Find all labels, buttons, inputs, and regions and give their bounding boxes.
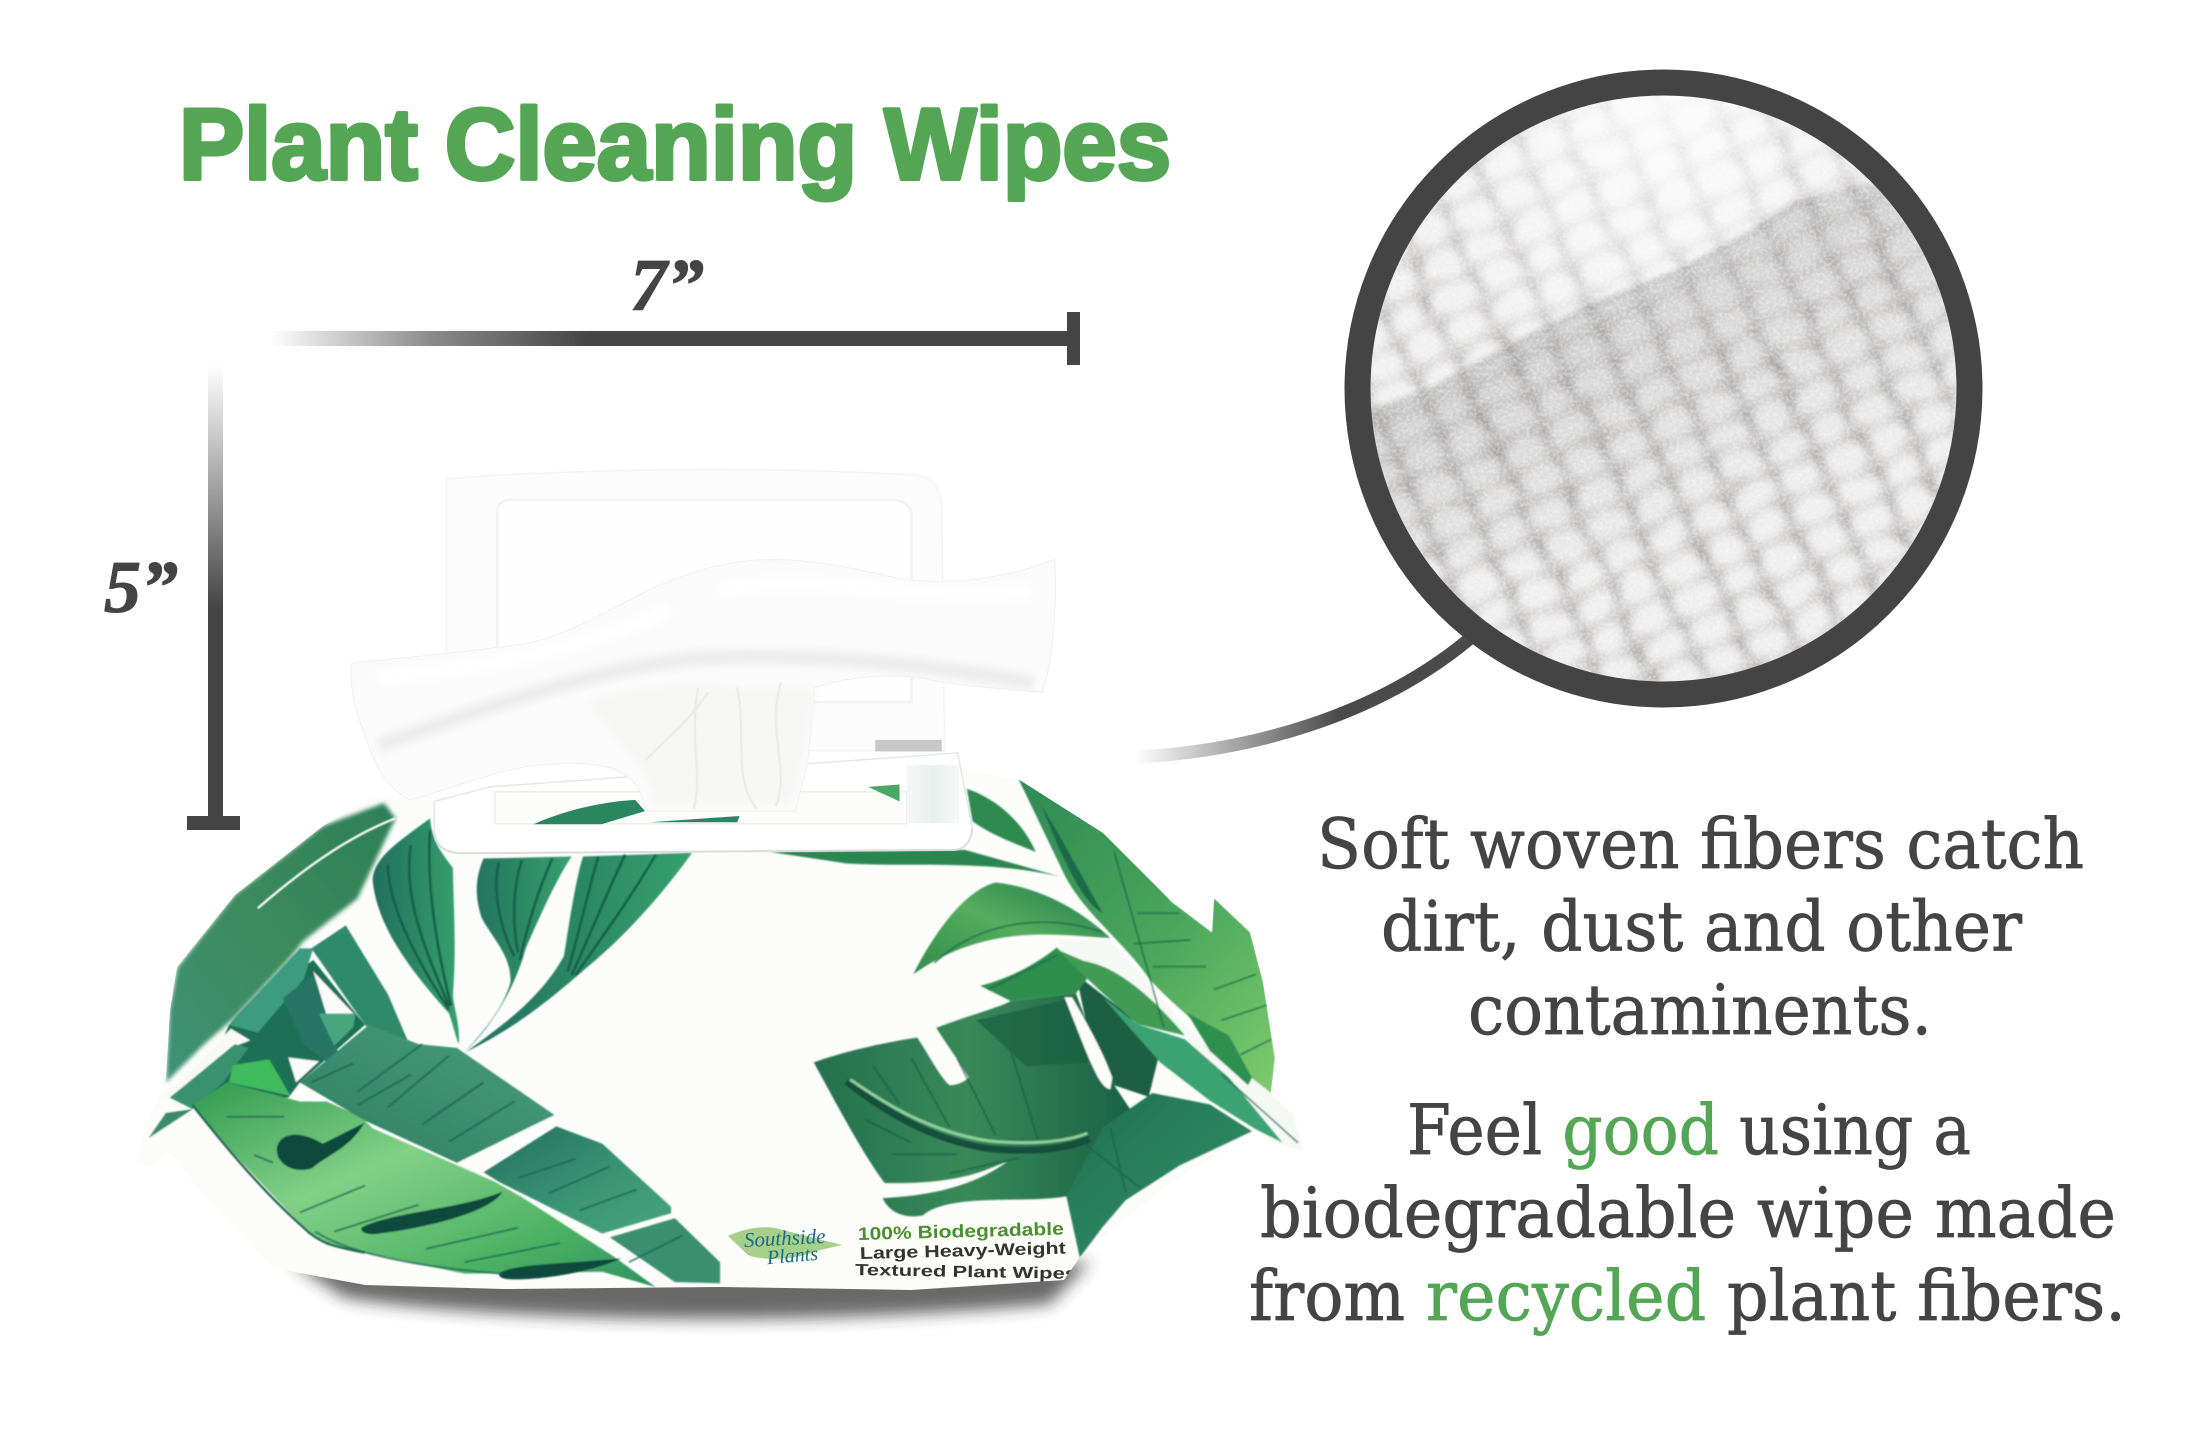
monstera leaf (814, 993, 1152, 1216)
big leaf main lime body (193, 1082, 656, 1287)
lower right cluster (1066, 1093, 1252, 1258)
frond veins (388, 830, 656, 1010)
big leaf veins (227, 1044, 683, 1274)
description: soft woven fibers (1317, 805, 2084, 1051)
package label text (855, 1219, 1077, 1283)
description: biodegradable (1249, 1091, 2126, 1337)
dark side stripe (1041, 806, 1103, 913)
dark blobs (277, 1123, 621, 1279)
package body (135, 771, 1304, 1290)
large side leaf (1019, 779, 1275, 1093)
small light frond (319, 1013, 355, 1046)
fold flap (1057, 949, 1185, 1036)
neon shade (229, 1059, 290, 1096)
description: biodegradable: biodegradable wipe made (1260, 1174, 2116, 1254)
folded flap leaf (229, 948, 313, 1033)
frame tab (907, 765, 959, 823)
white slit (1064, 997, 1112, 1089)
shadowed hollow (1076, 974, 1160, 1097)
package label text: Textured Plant Wipes (855, 1262, 1077, 1283)
wipe shading (378, 584, 1033, 804)
woven fabric texture (1370, 96, 1956, 682)
shaded underlay between leaves (197, 960, 365, 1098)
monstera veins (865, 1051, 1038, 1173)
wipe frame base (434, 753, 972, 853)
folded frond (311, 924, 408, 1040)
upper fronds (373, 818, 459, 1044)
monstera midrib (846, 1081, 1089, 1150)
printed leaves, left side (149, 779, 1304, 1287)
white gap (313, 971, 353, 1040)
shoulder leaf (166, 803, 396, 1082)
height dimension label: 5” (104, 547, 178, 629)
monstera dark patch (976, 997, 1087, 1066)
description: soft woven fibers: contaminents. (1468, 971, 1932, 1051)
description: soft woven fibers: Soft woven fibers catch (1317, 805, 2084, 885)
right lower leaf (1187, 1013, 1252, 1085)
brand logo (728, 1224, 842, 1269)
big leaf lower lobe (610, 1218, 720, 1283)
width dimension arrow (270, 312, 1080, 365)
description: biodegradable: Feel good using a (1407, 1091, 1971, 1171)
side veins (934, 852, 1298, 1192)
width dimension label: 7” (630, 245, 704, 327)
description: soft woven fibers: dirt, dust and other (1381, 888, 2022, 968)
big leaf upper lobe (300, 1025, 554, 1163)
wipes package (135, 470, 1304, 1319)
height dimension arrow (187, 365, 240, 830)
brand logo: Southside (743, 1224, 826, 1252)
fold flap lower (1103, 997, 1283, 1143)
bright leaf (913, 882, 1110, 974)
brand logo: Plants (765, 1243, 819, 1269)
open lid (446, 470, 945, 751)
package label text: 100% Biodegradable (858, 1219, 1064, 1244)
title: Plant Cleaning Wipes (179, 89, 1171, 201)
callout curve to magnified circle (1135, 628, 1482, 757)
lower flap (170, 1044, 248, 1109)
ground shadow (290, 1262, 1090, 1319)
package label text: Large Heavy-Weight (860, 1239, 1066, 1263)
shaded frond (282, 976, 338, 1062)
corner flap (149, 1109, 193, 1138)
teal frond (980, 948, 1087, 1001)
shoulder stripe (258, 818, 396, 908)
description: biodegradable: from recycled plant fibers. (1249, 1257, 2126, 1337)
pulled wipe (351, 559, 1055, 811)
white fold edge (1068, 954, 1298, 1143)
white sliver (288, 1057, 319, 1082)
tissue folds (645, 683, 781, 809)
magnified wipe texture circle (1340, 60, 1990, 720)
big leaf mid lobe (484, 1126, 671, 1233)
fold strip (158, 1029, 250, 1101)
narrow upper leaf (967, 789, 1036, 852)
long leaf under frame (770, 850, 1061, 877)
leaf seen through opening (534, 800, 645, 824)
